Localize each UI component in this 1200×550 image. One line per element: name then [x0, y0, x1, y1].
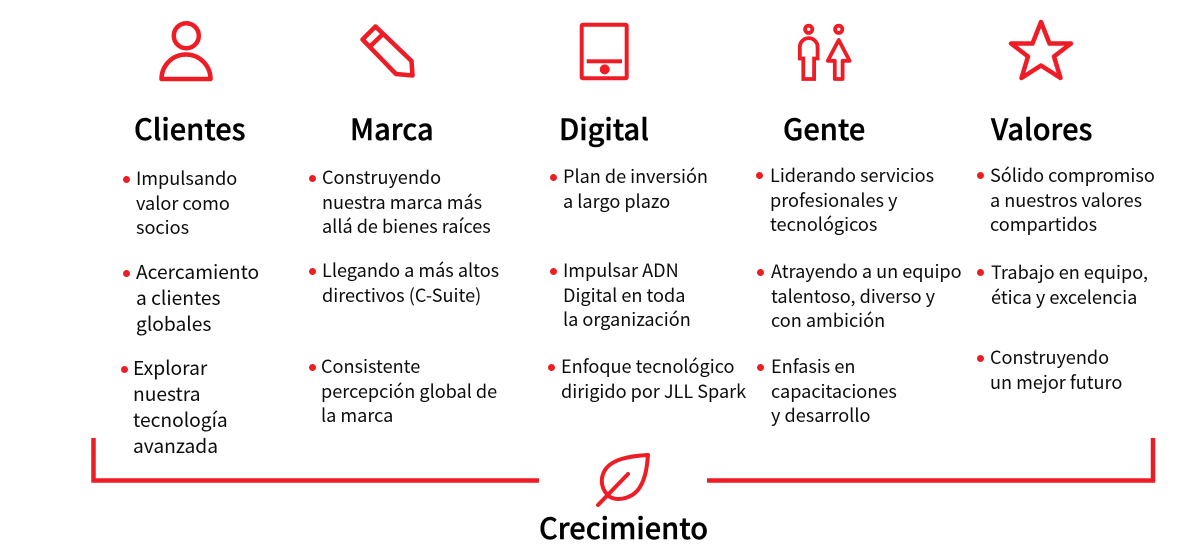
text: compartidos [990, 211, 1097, 237]
text: nuestra [133, 379, 201, 407]
bullet list: Gente [756, 162, 962, 428]
bullet list: Valores [977, 162, 1155, 394]
text: talentoso, diverso y [771, 282, 935, 308]
text: Acercamiento [136, 257, 259, 285]
text: con ambición [771, 307, 885, 333]
column: Digital [548, 107, 746, 404]
text: capacitaciones [771, 378, 897, 404]
icon: person [159, 21, 213, 82]
text: percepción global de [321, 378, 497, 404]
text: allá de bienes raíces [322, 213, 491, 239]
text: y desarrollo [771, 402, 870, 428]
text: a largo plazo [563, 188, 670, 214]
bullet list: Digital [548, 163, 746, 404]
text: Enfoque tecnológico [561, 353, 734, 379]
text: a nuestros valores [990, 186, 1142, 212]
text: Consistente [321, 353, 420, 379]
text: socios [136, 214, 189, 240]
text: Impulsando [136, 165, 237, 191]
text: Digital en toda [563, 282, 685, 308]
column: Gente [756, 107, 962, 428]
text: globales [136, 309, 211, 337]
text: tecnológicos [770, 211, 877, 237]
heading: Digital: Digital [559, 107, 649, 149]
text: Llegando a más altos [322, 257, 499, 283]
text: dirigido por JLL Spark [561, 378, 746, 404]
icon: tablet [580, 22, 629, 80]
text: a clientes [136, 283, 221, 311]
text: Atrayendo a un equipo [771, 258, 962, 284]
bullet list: Marca [309, 164, 499, 428]
heading: Gente: Gente [783, 107, 865, 149]
bullet list: Clientes [121, 165, 259, 459]
icon: man and woman [798, 24, 852, 81]
text: Plan de inversión [563, 163, 708, 189]
text: Enfasis en [771, 353, 855, 379]
text: un mejor futuro [990, 368, 1122, 394]
icon: star [1008, 20, 1074, 80]
text: Explorar [133, 353, 207, 381]
heading: Valores: Valores [991, 107, 1092, 149]
text: directivos (C-Suite) [322, 282, 481, 308]
text: Impulsar ADN [563, 257, 679, 283]
text: Trabajo en equipo, [991, 259, 1148, 285]
text: valor como [136, 190, 230, 216]
text: tecnología [133, 405, 228, 433]
text: avanzada [133, 431, 218, 459]
column: Clientes [121, 107, 259, 459]
icon: pencil [360, 24, 415, 78]
heading: Clientes: Clientes [134, 107, 246, 149]
text: ética y excelencia [991, 284, 1137, 310]
text: Construyendo [990, 344, 1109, 370]
heading: Crecimiento: Crecimiento [539, 506, 708, 548]
text: Sólido compromiso [990, 162, 1155, 188]
text: la organización [563, 306, 691, 332]
text: Liderando servicios [770, 162, 934, 188]
column: Marca [309, 107, 499, 428]
text: la marca [321, 402, 393, 428]
column: Valores [977, 107, 1155, 394]
text: Construyendo [322, 164, 441, 190]
text: nuestra marca más [322, 188, 482, 214]
heading: Marca: Marca [350, 107, 434, 149]
text: profesionales y [770, 186, 897, 212]
